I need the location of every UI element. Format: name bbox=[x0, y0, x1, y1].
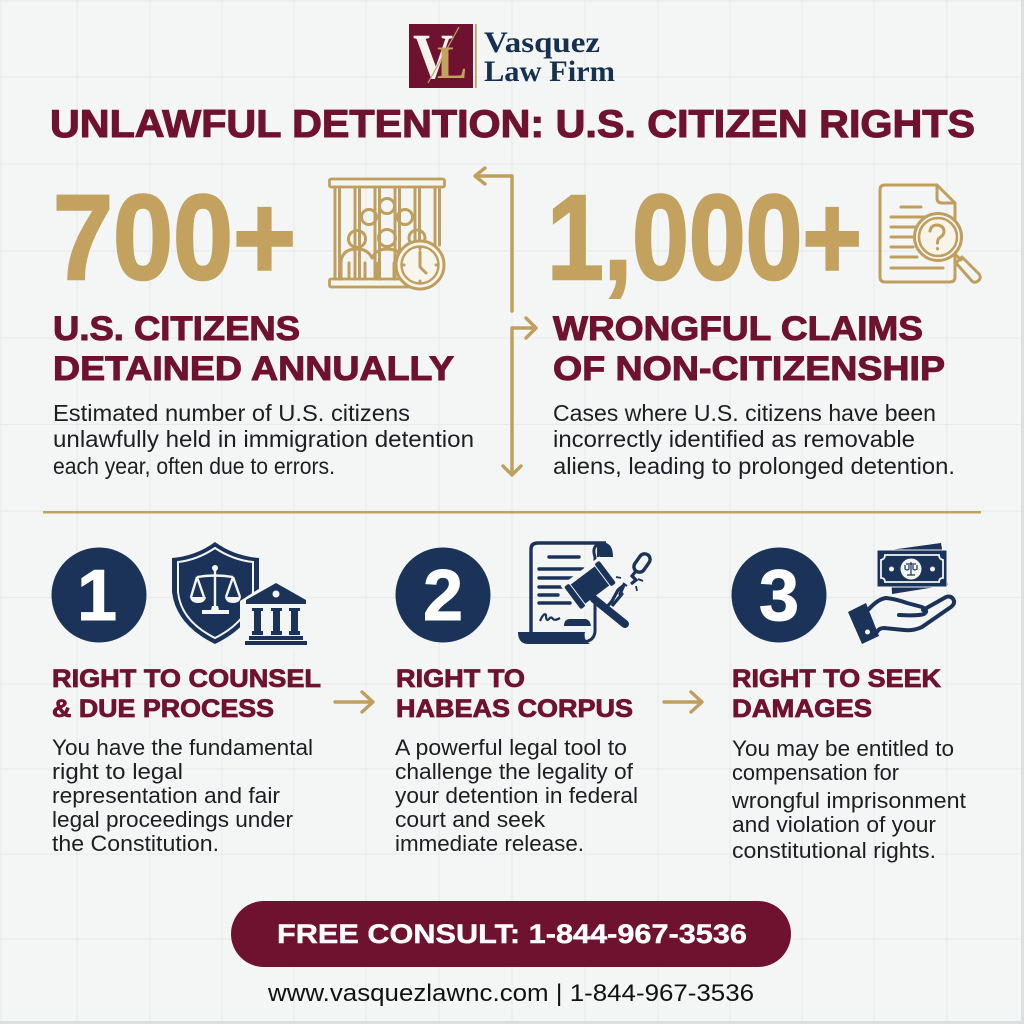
text: habeas corpus description bbox=[395, 735, 638, 856]
heading: wrongful claims of non-citizenship: WRONGFUL CLAIMS bbox=[553, 310, 923, 348]
text: counsel description: representation and fair bbox=[52, 783, 280, 808]
icon: shield with scales and courthouse bbox=[172, 542, 312, 650]
panel: right 2 habeas corpus bbox=[395, 543, 652, 856]
heading: right to seek damages: RIGHT TO SEEK bbox=[732, 665, 941, 693]
number badge 2 bbox=[396, 548, 490, 642]
heading: wrongful claims of non-citizenship: OF NON-CITIZENSHIP bbox=[553, 350, 945, 388]
text: counsel description: legal proceedings under bbox=[52, 807, 293, 832]
heading: right to habeas corpus: RIGHT TO bbox=[396, 665, 525, 693]
text: counsel description bbox=[52, 735, 313, 856]
text: damages description: constitutional rights. bbox=[732, 838, 936, 863]
call to action button: FREE CONSULT: 1-844-967-3536 bbox=[277, 919, 747, 949]
heading: wrongful claims of non-citizenship bbox=[553, 310, 945, 388]
text: habeas corpus description: court and seek bbox=[395, 807, 546, 832]
panel: 1,000+ wrongful claims bbox=[547, 169, 980, 479]
heading: right to counsel and due process: & DUE PROCESS bbox=[52, 695, 274, 723]
logo: Vasquez Law Firm: Law Firm bbox=[484, 55, 615, 88]
arrows: centre connector bbox=[475, 168, 536, 475]
text: detained description: unlawfully held in immigration detention bbox=[53, 426, 474, 452]
call to action button bbox=[231, 901, 791, 967]
icon: document with magnifier bbox=[880, 185, 980, 282]
footer contact line: www.vasquezlawnc.com | 1-844-967-3536 bbox=[267, 980, 754, 1007]
logo: Vasquez Law Firm: V bbox=[413, 21, 453, 93]
number badge 2: 2 bbox=[423, 556, 463, 636]
text: damages description: and violation of your bbox=[732, 812, 936, 837]
text: counsel description: right to legal bbox=[52, 759, 183, 784]
number badge 1 bbox=[52, 548, 146, 642]
text: habeas corpus description: A powerful legal tool to bbox=[395, 735, 627, 760]
heading: right to habeas corpus bbox=[396, 665, 633, 723]
text: damages description bbox=[731, 736, 966, 863]
heading: right to seek damages: DAMAGES bbox=[732, 695, 872, 723]
text: damages description: You may be entitled to bbox=[732, 736, 954, 761]
heading: right to seek damages bbox=[732, 665, 941, 723]
text: wrongful claims description: Cases where U.S. citizens have been bbox=[553, 400, 936, 426]
text: wrongful claims description bbox=[553, 400, 955, 479]
heading: U.S. citizens detained annually: DETAINED ANNUALLY bbox=[53, 350, 454, 388]
logo: Vasquez Law Firm: Vasquez bbox=[484, 26, 600, 59]
text: damages description: compensation for bbox=[732, 760, 899, 785]
text: habeas corpus description: challenge the legality of bbox=[395, 759, 634, 784]
text: habeas corpus description: your detention in federal bbox=[395, 783, 638, 808]
heading: U.S. citizens detained annually: U.S. CITIZENS bbox=[53, 310, 300, 348]
text: damages description: wrongful imprisonment bbox=[731, 788, 966, 813]
stat: 700+: 700+ bbox=[53, 169, 296, 305]
text: counsel description: the Constitution. bbox=[52, 831, 219, 856]
stat: 1,000+: 1,000+ bbox=[547, 169, 862, 305]
number badge 1: 1 bbox=[77, 556, 117, 636]
heading: right to habeas corpus: HABEAS CORPUS bbox=[396, 695, 633, 723]
text: detained description: Estimated number of U.S. citizens bbox=[53, 400, 410, 426]
arrow: right 2 to right 3 bbox=[664, 692, 702, 712]
text: detained description: each year, often due to errors. bbox=[53, 453, 335, 479]
icon: jail bars with people and clock bbox=[330, 179, 444, 289]
panel: 700+ citizens detained bbox=[53, 169, 474, 479]
arrow: right 1 to right 2 bbox=[335, 692, 373, 712]
logo: Vasquez Law Firm bbox=[409, 21, 615, 93]
heading: right to counsel and due process: RIGHT TO COUNSEL bbox=[52, 665, 321, 693]
logo: Vasquez Law Firm: L bbox=[437, 37, 467, 89]
text: detained description bbox=[53, 400, 474, 479]
number badge 3 bbox=[732, 548, 826, 642]
panel: right 3 seek damages bbox=[731, 543, 966, 863]
title: UNLAWFUL DETENTION: U.S. CITIZEN RIGHTS bbox=[50, 103, 975, 146]
text: habeas corpus description: immediate release. bbox=[395, 831, 584, 856]
text: wrongful claims description: aliens, leading to prolonged detention. bbox=[553, 453, 955, 479]
heading: U.S. citizens detained annually bbox=[53, 310, 454, 388]
text: counsel description: You have the fundamental bbox=[52, 735, 313, 760]
text: wrongful claims description: incorrectly identified as removable bbox=[553, 426, 915, 452]
icon: hand holding money bbox=[848, 543, 954, 644]
icon: scroll with gavel and broken chain bbox=[518, 543, 652, 644]
heading: right to counsel and due process bbox=[52, 665, 321, 723]
panel: right 1 counsel and due process bbox=[52, 542, 321, 856]
number badge 3: 3 bbox=[759, 556, 799, 636]
